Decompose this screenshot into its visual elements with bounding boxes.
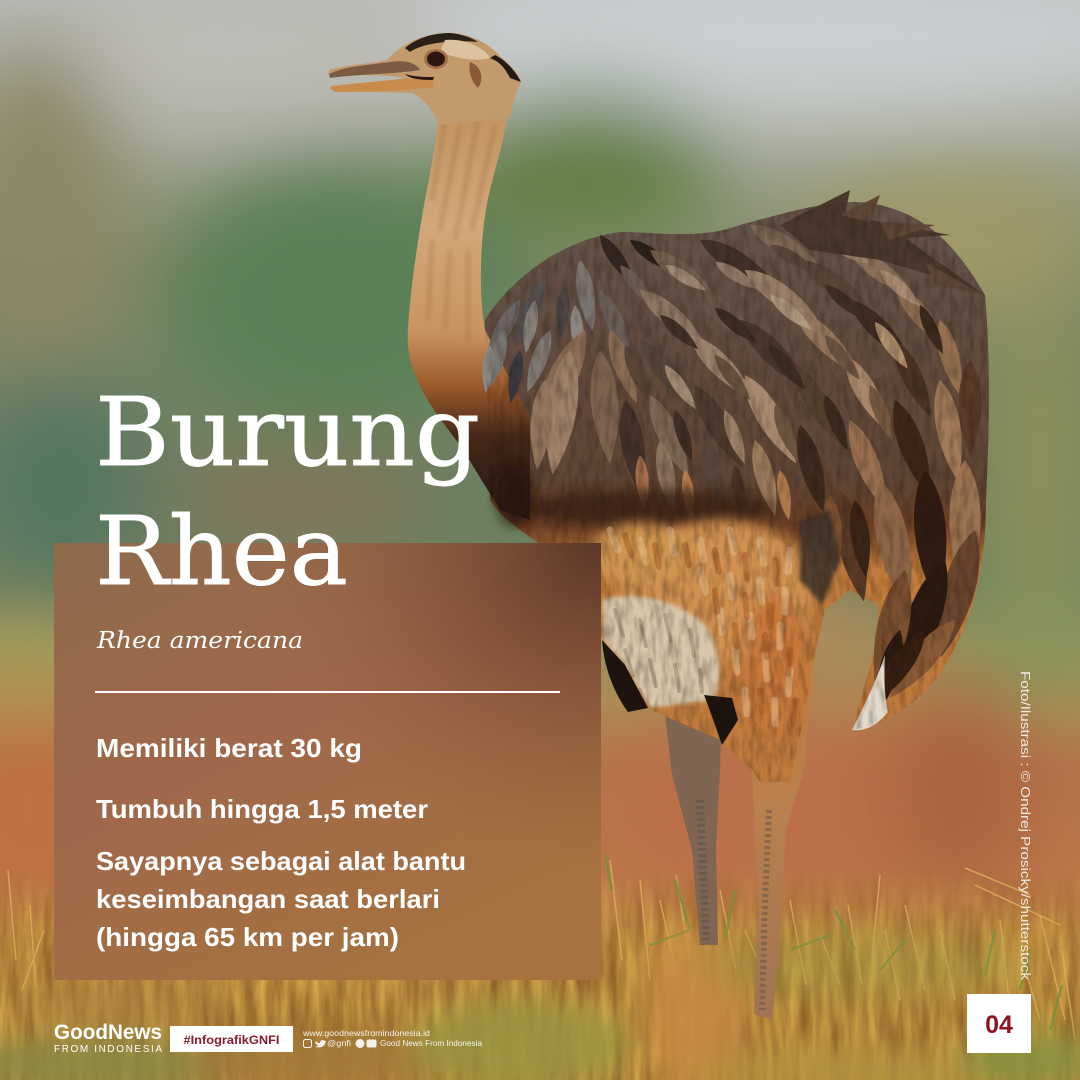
social links: @gnfi bbox=[327, 1038, 351, 1048]
social links: www.goodnewsfromindonesia.id bbox=[302, 1028, 430, 1038]
icon: facebook bbox=[356, 1039, 364, 1048]
title: Burung Rhea: Rhea bbox=[95, 497, 348, 607]
facts text: Sayapnya sebagai alat bantu bbox=[96, 846, 466, 876]
logo: GoodNews From Indonesia: GoodNews bbox=[54, 1021, 162, 1044]
icon: instagram bbox=[304, 1040, 312, 1048]
page number badge: 04 bbox=[985, 1011, 1013, 1039]
cream flank bbox=[603, 596, 719, 708]
social links: Good News From Indonesia bbox=[380, 1038, 482, 1048]
mid plumage bbox=[632, 211, 969, 521]
grey shoulder feathers bbox=[480, 231, 678, 404]
grey striped rump bbox=[800, 510, 840, 605]
hashtag badge: #InfografikGNFI bbox=[184, 1033, 280, 1047]
bird legs bbox=[662, 680, 812, 1020]
facts text: (hingga 65 km per jam) bbox=[96, 922, 399, 952]
tail plume spikes bbox=[780, 190, 985, 295]
divider line bbox=[95, 691, 560, 693]
social links bbox=[302, 1028, 482, 1048]
dark underwing patches bbox=[602, 640, 648, 712]
title: Burung Rhea: Burung bbox=[95, 378, 480, 488]
hashtag badge bbox=[170, 1026, 293, 1052]
facts text: keseimbangan saat berlari bbox=[96, 884, 440, 914]
dark mid band bbox=[525, 490, 775, 526]
logo: GoodNews From Indonesia bbox=[54, 1021, 162, 1055]
rear plumage bbox=[821, 360, 990, 714]
bird plumage bbox=[480, 190, 990, 790]
title: Burung Rhea bbox=[95, 378, 480, 607]
scientific name: Rhea americana bbox=[96, 628, 303, 654]
facts text bbox=[96, 733, 466, 952]
facts text: Tumbuh hingga 1,5 meter bbox=[96, 794, 428, 824]
photo credit: Foto/Ilustrasi : © Ondrej Prosicky/shutterstock bbox=[1018, 671, 1033, 981]
grass foreground texture bbox=[0, 855, 1080, 1080]
info panel bbox=[54, 543, 601, 980]
icon: twitter bbox=[315, 1040, 326, 1047]
page number badge bbox=[967, 994, 1031, 1053]
pale tail tip bbox=[852, 655, 888, 730]
logo: GoodNews From Indonesia: FROM INDONESIA bbox=[54, 1044, 162, 1055]
tan wing patch bbox=[521, 324, 660, 497]
feather fibre texture bbox=[480, 190, 990, 790]
orange belly bbox=[590, 520, 815, 745]
bird body mass bbox=[485, 202, 989, 782]
facts text: Memiliki berat 30 kg bbox=[96, 733, 362, 763]
bird neck and head bbox=[328, 33, 530, 520]
bird: rhea bbox=[328, 33, 990, 1020]
icon: youtube bbox=[366, 1040, 376, 1048]
